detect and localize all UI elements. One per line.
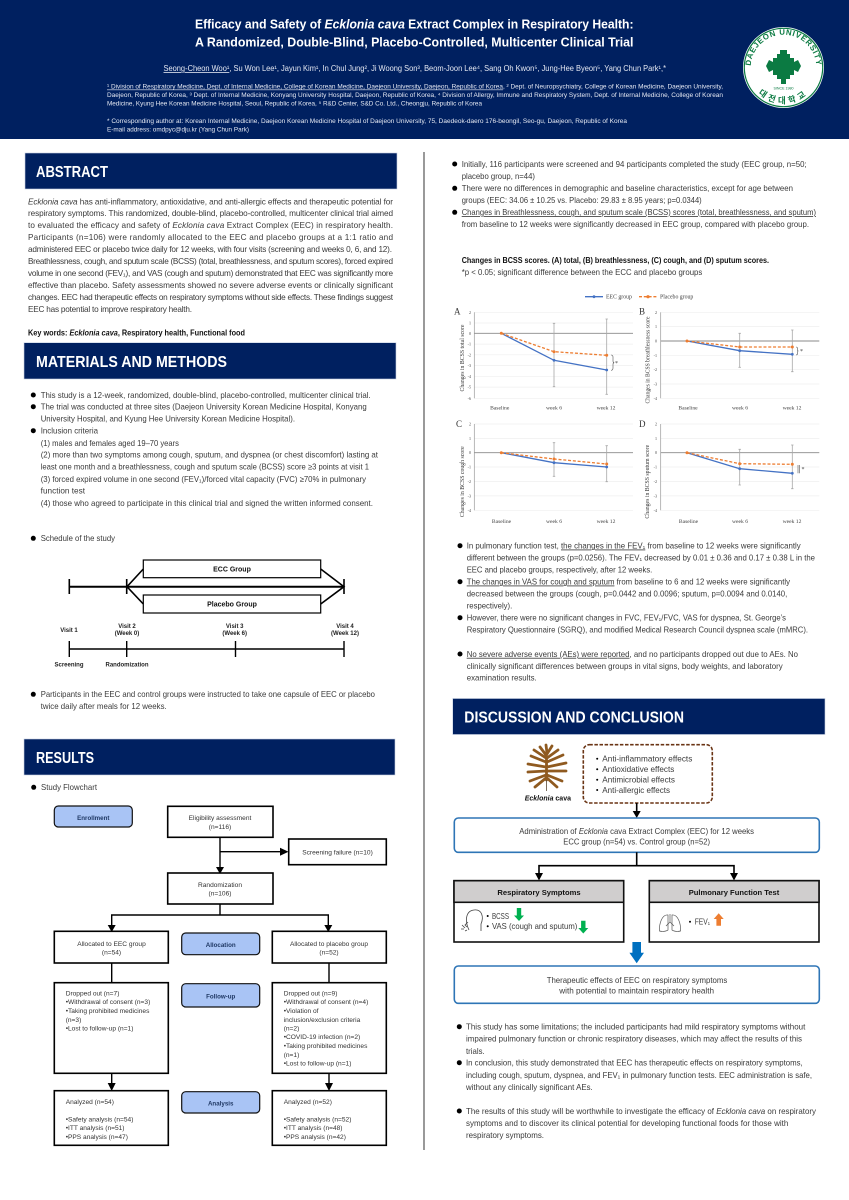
box: placebo dropouts: •COVID-19 infection (n=2) [284,1034,360,1041]
line chart A: total score: -4 [468,374,471,379]
box: placebo dropouts [272,983,386,1073]
box: placebo dropouts: •Withdrawal of consent (n=4) [284,999,368,1006]
icon: green down arrow BCSS [514,908,524,921]
key words: Key words: Ecklonia cava, Respiratory health, Functional food [28,328,245,338]
BCSS figure caption: *p < 0.05; significant difference between the ECC and placebo groups [462,268,702,277]
line chart A: total score: week 6 [546,406,562,412]
chart legend: EEC group [606,294,632,300]
panel: discussion and conclusion heading [453,698,825,734]
abstract text: to evaluated the efficacy and safety of Ecklonia cava Extract Complex (EEC) in respiratory health. [28,221,393,230]
callout: Ecklonia cava effects: Anti-allergic effects [602,786,670,795]
results findings text: There were no differences in demographic and baseline characteristics, except for age between [462,184,793,193]
line chart C: cough score: -4 [468,508,471,513]
box: EEC analyzed: Analyzed (n=54) [66,1099,114,1106]
line chart B: breathlessness score: Baseline [678,406,698,412]
line chart D: sputum score: -2 [654,479,657,484]
study flowchart [54,806,386,1145]
callout: Ecklonia cava effects: Anti-inflammatory effects [602,754,692,764]
line chart A: total score: * [615,361,618,367]
box: administration of EEC: ECC group (n=54) vs. Control group (n=52) [563,838,710,846]
box: eligibility assessment: (n=116) [209,824,231,831]
conclusion bullet list: without any clinically significant AEs. [465,1083,593,1092]
box: allocated to placebo group [272,931,386,963]
study schedule diagram: (Week 6) [222,631,247,637]
column divider [423,152,425,1150]
box: EEC dropouts: •Taking prohibited medicines [66,1008,150,1015]
line chart B: breathlessness score: B [639,306,645,316]
box: EEC analyzed: •Safety analysis (n=54) [66,1116,133,1124]
box: screening failure: Screening failure (n=10) [302,849,373,856]
abstract text: Ecklonia cava has anti-inflammatory, antioxidative, and anti-allergic effects and therapeutic potential for [28,197,393,206]
pulmonary function and safety findings: The changes in VAS for cough and sputum from baseline to 6 and 12 weeks were significantly [467,578,791,586]
study schedule diagram [54,560,359,668]
abstract text [28,197,394,314]
icon: Daejeon University logo: 대전대학교 [759,89,806,104]
line chart D: sputum score: -1 [654,464,657,470]
icon: Daejeon University logo: SINCE 1980 [774,86,793,90]
box: EEC dropouts: •Withdrawal of consent (n=3) [66,999,150,1006]
box: placebo dropouts: •Violation of [284,1008,319,1015]
pulmonary function and safety findings: clinically significant differences between groups in vital signs, body weights, and laboratory [467,662,784,671]
line chart C: cough score: Baseline [492,519,512,525]
line chart A: total score: Changes in BCSS total score [460,324,466,391]
conclusion bullet list: trials. [466,1047,485,1056]
line chart B: breathlessness score: week 6 [732,406,748,412]
box: screening failure [289,839,386,865]
box: EEC dropouts [54,983,168,1073]
line chart C: cough score: 0 [469,450,471,455]
abstract text: Participants (n=106) were randomly allocated to the EEC and placebo groups at a 1:1 ratio and [28,233,393,242]
box: placebo dropouts: Dropped out (n=9) [284,990,337,998]
conclusion bullet list: impaired pulmonary function or chronic respiratory diseases, which may affect the results of this [466,1034,802,1044]
study schedule diagram: Visit 4 [336,624,354,630]
box: therapeutic effects conclusion: Therapeutic effects of EEC on respiratory symptoms [547,976,727,985]
follow-up stage label [182,984,260,1007]
line chart B: breathlessness score: -2 [654,367,657,372]
box: placebo dropouts: •Taking prohibited medicines [284,1043,368,1050]
allocation stage label [182,933,260,955]
panel: respiratory symptoms [454,881,624,942]
line chart D: sputum score: -3 [654,493,657,498]
pulmonary function and safety findings: examination results. [467,674,537,682]
arrow: effects to administration [633,803,641,818]
methods bullet list: This study is a 12-week, randomized, double-blind, placebo-controlled, multicenter clinical trial. [41,391,371,400]
study schedule diagram: Visit 1 [60,628,78,634]
line chart D: sputum score [639,419,819,525]
methods bullet list: University Hospital, and Kyung Hee University Korean Medicine Hospital). [41,414,295,424]
line chart B: breathlessness score: 0 [655,338,657,344]
capsule instructions: twice daily after meals for 12 weeks. [41,702,167,711]
methods bullet list: (1) males and females aged 19–70 years [41,439,179,448]
panel: discussion and conclusion heading: DISCUSSION AND CONCLUSION [464,710,684,726]
line chart C: cough score [456,419,633,525]
abstract text: changes. EEC had therapeutic effects on respiratory symptoms without side effects. These findings suggest [28,293,394,302]
panel: pulmonary function test [649,881,819,942]
line chart A: total score: -3 [468,363,471,368]
methods bullet list: least one month and a breathlessness, cough and sputum scale (BCSS) score ≥3 points at visit 1 [41,462,369,472]
panel: results heading: RESULTS [36,750,94,767]
study schedule diagram: Visit 2 [118,624,136,630]
heading: abstract [25,153,397,189]
box: placebo analyzed: •PPS analysis (n=42) [284,1134,346,1141]
line chart A: total score [454,306,633,412]
line chart A: total score: A [454,306,461,316]
abstract text: Breathlessness, cough, and sputum scale (BCSS) (total, breathlessness, and sputum scores), forced expired [28,257,393,266]
study schedule diagram: ECC Group [213,566,251,574]
box: placebo dropouts: inclusion/exclusion criteria [284,1017,361,1024]
flow connectors [108,837,333,1091]
line chart A: total score: -2 [468,352,471,357]
methods bullet list: (2) more than two symptoms among cough, sputum, and dyspnea (or chest discomfort) lasting at [41,450,379,460]
line chart A: total score: -1 [468,342,471,347]
line chart B: breathlessness score: 2 [655,310,657,315]
results findings text: Initially, 116 participants were screened and 94 participants completed the study (EEC group, n=50; [462,160,807,169]
panel: respiratory symptoms: Respiratory Symptoms [497,888,581,897]
box: EEC analyzed [54,1091,168,1145]
box: eligibility assessment: Eligibility assessment [189,815,251,822]
box: allocated to EEC group: Allocated to EEC group [77,941,146,948]
chart legend: Placebo group [660,294,693,300]
title: A Randomized, Double-Blind, Placebo-Controlled, Multicenter Clinical Trial [195,36,634,50]
pulmonary function and safety findings: different between the groups (p=0.0256). The FEV₁ decreased by 0.01 ± 0.36 and 0.17 ± 0.38 L in the [467,554,815,562]
enrollment stage label [54,806,132,827]
corresponding author: E-mail address: omdpyc@dju.kr (Yang Chun Park) [107,126,249,134]
callout: Ecklonia cava effects [583,745,712,803]
box: therapeutic effects conclusion [454,966,819,1003]
panel: materials and methods [24,343,396,711]
line chart B: breathlessness score [639,306,819,412]
study schedule diagram: Randomization [106,662,149,668]
line chart C: cough score: Changes in BCSS cough score [460,446,466,517]
methods bullet list: (4) those who agreed to participate in this clinical trial and signed the written informed consent. [41,499,373,508]
corresponding author [107,118,627,134]
line chart D: sputum score: week 6 [732,519,748,525]
line chart D: sputum score: Baseline [679,519,699,525]
box: allocated to placebo group: (n=52) [319,950,339,957]
study flowchart label: Study Flowchart [41,783,98,792]
study schedule diagram: Screening [54,662,84,668]
line chart B: breathlessness score: -4 [654,396,657,401]
box: placebo analyzed: •Safety analysis (n=52) [284,1116,351,1124]
line chart B: breathlessness score: -1 [654,353,657,358]
box: administration of EEC [454,818,819,852]
line chart D: sputum score: 0 [655,450,657,455]
line chart C: cough score: C [456,419,462,429]
conclusion bullet list: This study has some limitations; the included participants had mild respiratory symptoms without [466,1022,806,1032]
BCSS figure caption: Changes in BCSS scores. (A) total, (B) breathlessness, (C) cough, and (D) sputum scores. [462,256,769,265]
abstract text: respiratory symptoms. This randomized, double-blind, placebo-controlled, multicenter clinical trial aimed [28,209,393,218]
line chart C: cough score: 1 [469,436,471,441]
abstract text: effective than placebo. Safety assessments showed no severe adverse events or clinically significant [28,281,394,290]
pulmonary function and safety findings: decreased between the groups (cough, p=0.0442 and 0.0096; sputum, p=0.0094 and 0.0140, [467,590,787,598]
icon: Ecklonia cava seaweed [525,745,572,802]
box: therapeutic effects conclusion: with potential to maintain respiratory health [558,986,714,996]
line chart D: sputum score: * [802,467,804,473]
line chart A: total score: Baseline [490,406,510,412]
allocation stage label: Allocation [206,942,236,949]
icon: Daejeon University logo: DAEJEON UNIVERSITY [745,29,822,66]
corresponding author: * Corresponding author at: Korean Internal Medicine, Daejeon Korean Medicine Hospital of Daejeon University, 75, Daedeok-daero 176-beongil, Seo-gu, Daejeon, Republic of Korea [107,118,627,125]
follow-up stage label: Follow-up [206,994,236,1000]
methods bullet list [31,391,379,508]
line chart D: sputum score: week 12 [783,519,802,525]
panel: pulmonary function test: Pulmonary Function Test [689,888,780,897]
methods bullet list: function test [41,486,86,496]
line chart D: sputum score: Changes in BCSS sputum score [645,444,651,519]
panel: pulmonary function test: FEV₁ [695,918,710,926]
capsule instructions: Participants in the EEC and control groups were instructed to take one capsule of EEC or placebo [41,690,375,699]
heading: materials and methods: MATERIALS AND METHODS [36,354,227,371]
box: EEC analyzed: •PPS analysis (n=47) [66,1134,128,1141]
line chart A: total score: 2 [469,310,471,315]
callout: Ecklonia cava effects: Antimicrobial effects [602,775,675,784]
heading: materials and methods [24,343,396,379]
conclusion bullet list [457,1022,817,1140]
box: eligibility assessment [168,806,273,837]
title: Efficacy and Safety of Ecklonia cava Extract Complex in Respiratory Health: [195,18,634,32]
line chart C: cough score: week 12 [597,519,616,525]
conclusion bullet list: respiratory symptoms. [466,1131,544,1140]
affiliations: Daejeon, Republic of Korea, ³ Dept. of Internal Medicine, Konyang University Hospital, Daejeon, Republic of Korea, ⁴ Division of Allergy, Immune and Respiratory System, Dept. of Internal Medicine, College of Korean [107,92,723,99]
line chart C: cough score: -1 [468,464,471,470]
line chart A: total score: -6 [468,396,471,401]
line chart B: breathlessness score: * [800,349,803,355]
heading: abstract: ABSTRACT [36,164,108,181]
pulmonary function and safety findings: However, there were no significant changes in FVC, FEV₁/FVC, VAS for dyspnea, St. George’s [467,614,786,622]
study schedule diagram: (Week 12) [331,631,359,637]
chart legend [585,294,693,300]
box: allocated to EEC group: (n=54) [102,950,121,957]
box: placebo dropouts: (n=2) [284,1026,299,1032]
pulmonary function and safety findings: respectively). [467,602,512,610]
header banner [0,0,849,139]
capsule instructions [31,690,375,711]
icon: lungs [659,914,681,931]
box: EEC dropouts: •Lost to follow-up (n=1) [66,1026,133,1032]
panel: abstract [25,153,397,338]
arrow: to therapeutic effects [629,942,644,963]
line chart C: cough score: 2 [469,422,471,426]
line chart A: total score: 1 [469,320,471,326]
icon: green down arrow VAS [578,921,588,934]
pulmonary function and safety findings: EEC and placebo groups, respectively, after 12 weeks. [467,566,652,574]
abstract text: EEC has potential to improve respiratory health. [28,305,192,314]
box: placebo analyzed: •ITT analysis (n=48) [284,1125,343,1132]
authors: Seong-Cheon Woo¹, Su Won Lee¹, Jayun Kim¹, In Chul Jung², Ji Woong Son³, Beom-Joon Lee⁴, Sang Oh Kwon⁵, Jung-Hee Byeon⁵, Yang Chun Park¹,* [164,64,666,73]
box: EEC analyzed: •ITT analysis (n=51) [66,1125,125,1132]
box: randomization: (n=106) [209,891,231,898]
box: placebo analyzed: Analyzed (n=52) [284,1099,332,1106]
icon: orange up arrow [714,913,724,926]
box: placebo dropouts: (n=1) [284,1052,299,1059]
box: placebo dropouts: •Lost to follow-up (n=1) [284,1060,351,1068]
abstract text: administered EEC or placebo twice daily for 12 weeks, with four visits (screening and weeks 0, 6, and 12). [28,245,392,254]
line chart D: sputum score: D [639,419,646,429]
results findings text [452,160,816,229]
results findings text: from baseline to 12 weeks were significantly decreased in EEC group, compared with placebo group. [462,220,809,229]
box: EEC dropouts: (n=3) [66,1017,81,1024]
line chart A: total score: week 12 [597,406,616,412]
line chart C: cough score: week 6 [546,519,562,525]
box: EEC dropouts: Dropped out (n=7) [66,990,119,998]
affiliations: ¹ Division of Respiratory Medicine, Dept. of Internal Medicine, College of Korean Medicine, Daejeon University, Daejeon, Republic of Korea , ² Dept. of Neuropsychiatry, College of Korean Medicine, Daejeon University, [107,84,723,90]
line chart D: sputum score: 2 [655,422,657,426]
box: placebo analyzed [272,1091,386,1145]
abstract text: volume in one second (FEV₁), and VAS (cough and sputum) demonstrated that EEC was significantly more [28,269,393,278]
pulmonary function and safety findings [458,542,815,682]
pulmonary function and safety findings: No severe adverse events (AEs) were reported, and no participants dropped out due to AEs. No [467,650,798,659]
line chart B: breathlessness score: Changes in BCSS breathlessness score [646,316,652,404]
affiliations [107,84,723,108]
panel: respiratory symptoms: VAS (cough and sputum) [492,922,578,931]
line chart A: total score: 0 [469,331,471,336]
conclusion bullet list: In conclusion, this study demonstrated that EEC has therapeutic effects on respiratory symptoms, [466,1058,803,1068]
panel: results heading [24,739,395,775]
line chart A: total score: -5 [468,385,471,390]
study schedule diagram: (Week 0) [115,631,139,637]
line chart D: sputum score: -4 [654,508,657,513]
study schedule diagram: Placebo Group [207,602,257,608]
results findings text: groups (EEC: 34.06 ± 10.25 vs. Placebo: 29.83 ± 8.95 years; p=0.0344) [462,196,702,205]
analysis stage label [182,1092,260,1113]
icon: coughing head [461,910,482,931]
species label: Ecklonia cava [525,794,572,802]
line chart B: breathlessness score: week 12 [783,406,802,412]
analysis stage label: Analysis [208,1100,234,1107]
methods bullet list: (3) forced expired volume in one second (FEV₁)/forced vital capacity (FVC) ≥70% in pulmonary [41,475,367,484]
methods bullet list: Inclusion criteria [41,426,98,436]
conclusion bullet list: The results of this study will be worthwhile to investigate the efficacy of Ecklonia cava on respiratory [466,1107,817,1116]
study schedule diagram: Visit 3 [226,624,244,630]
results findings text: placebo group, n=44) [462,172,535,181]
conclusion bullet list: including cough, sputum, dyspnea, and FEV₁ in pulmonary function tests. EEC administration is safe, [466,1071,812,1080]
line chart C: cough score: -2 [468,479,471,484]
box: allocated to placebo group: Allocated to placebo group [290,941,368,948]
title [195,18,634,50]
line chart B: breathlessness score: 1 [655,324,657,329]
conclusion bullet list: symptoms and to discover its clinical potential for developing functional foods for those with [466,1119,789,1128]
box: allocated to EEC group [54,931,168,963]
enrollment stage label: Enrollment [77,815,109,822]
pulmonary function and safety findings: In pulmonary function test, the changes in the FEV₁ from baseline to 12 weeks were significantly [467,542,802,550]
panel: respiratory symptoms: BCSS [492,912,509,921]
BCSS figure caption [462,256,769,277]
line chart D: sputum score: 1 [655,436,657,441]
schedule label: Schedule of the study [41,534,116,543]
line chart B: breathlessness score: -3 [654,382,657,386]
line chart C: cough score: -3 [468,493,471,498]
box: randomization: Randomization [198,882,242,889]
icon: Daejeon University logo [743,27,824,108]
callout: Ecklonia cava effects: Antioxidative effects [602,765,674,774]
affiliations: Medicine, Kyung Hee Korean Medicine Hospital, Seoul, Republic of Korea, ⁵ R&D Center, S&D Co. Ltd., Cheongju, Republic of Korea [107,100,482,108]
arrows: branch to outcome panels [535,852,738,880]
box: randomization [168,873,273,904]
results findings text: Changes in Breathlessness, cough, and sputum scale (BCSS) scores (total, breathlessness, and sputum) [462,208,816,217]
box: administration of EEC: Administration of Ecklonia cava Extract Complex (EEC) for 12 weeks [519,827,754,836]
pulmonary function and safety findings: Respiratory Questionnaire (SGRQ), and modified Medical Research Council dyspnea scale (mMRC). [467,626,808,634]
methods bullet list: The trial was conducted at three sites (Daejeon University Korean Medicine Hospital, Konyang [41,402,367,412]
